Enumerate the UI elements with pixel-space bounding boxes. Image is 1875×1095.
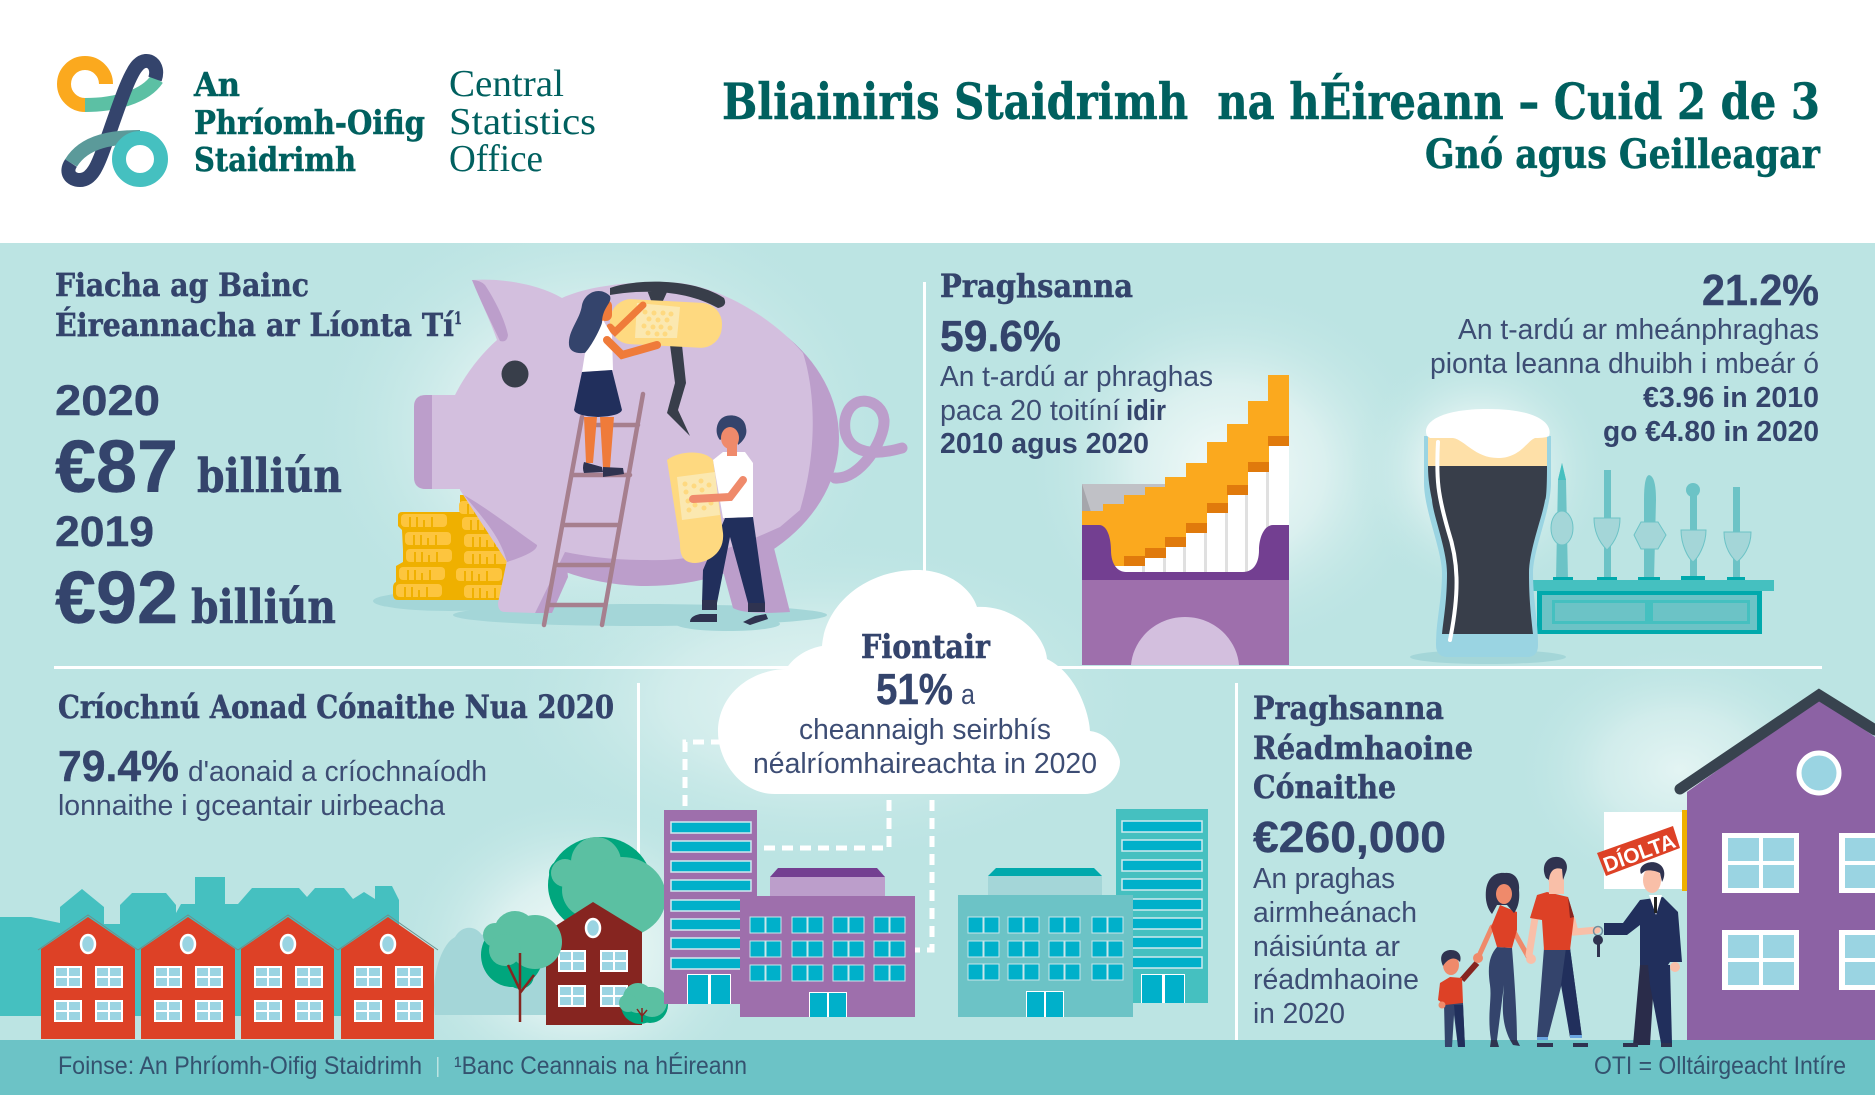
- heading: prices: Praghsanna: [940, 267, 1133, 305]
- illustration: trees and brown house: [481, 837, 668, 1025]
- illustration: town skyline: [0, 877, 549, 1016]
- heading: property prices: [1253, 689, 1473, 806]
- stat: pint price rise: 21.2%: [1702, 266, 1819, 315]
- heading: dwelling completions: Críochnú Aonad Cónaithe Nua 2020: [58, 688, 614, 726]
- stat: cigarette price rise: idir: [1126, 395, 1166, 427]
- panel: enterprises cloud computing: [664, 570, 1208, 1017]
- stat: pint price rise: go €4.80 in 2020: [1603, 416, 1819, 448]
- logo English name: [449, 63, 596, 180]
- stat: urban dwellings: lonnaithe i gceantair uirbeacha: [58, 790, 446, 822]
- stat: mean price: airmheánach: [1253, 897, 1417, 929]
- ladder: [544, 394, 643, 625]
- logo Irish name: Staidrimh: [194, 140, 356, 179]
- footer abbreviation: OTI = Olltáirgeacht Intíre: [1594, 1052, 1846, 1080]
- logo mark: [64, 61, 161, 180]
- stat: cigarette price rise: paca 20 toitíní: [940, 395, 1120, 427]
- logo English name: Statistics: [449, 101, 596, 143]
- illustration: cigarette pack: [1082, 375, 1289, 665]
- stat: mean price: in 2020: [1253, 998, 1345, 1030]
- sign: sold: [1597, 810, 1687, 891]
- stat: 2019 debt: [55, 508, 336, 639]
- illustration: coins: [373, 495, 527, 611]
- stat: mean price: [1253, 813, 1446, 1030]
- illustration: estate agent with keys: [1593, 862, 1682, 1047]
- stat: mean price: réadmhaoine: [1253, 964, 1419, 996]
- stat: 2020 debt: billiún: [197, 449, 342, 504]
- illustration: man with plaster: [667, 415, 768, 625]
- stat: 2019 debt: billiún: [191, 580, 336, 635]
- heading: household debt: [55, 266, 462, 344]
- logo Irish name: Phríomh-Oifig: [194, 103, 425, 142]
- cloud text: néalríomhaireachta in 2020: [753, 748, 1097, 780]
- panel: household debt: [55, 266, 902, 639]
- stat: 2019 debt: €92: [55, 556, 178, 639]
- stat: mean price: €260,000: [1253, 813, 1446, 862]
- illustration: boy: [1438, 950, 1483, 1047]
- illustration: purple office buildings: [664, 810, 915, 1017]
- cloud text: 51%: [876, 665, 953, 714]
- stat: urban dwellings: [58, 742, 487, 822]
- panel: prices: [940, 266, 1819, 665]
- heading: property prices: Cónaithe: [1253, 768, 1396, 806]
- illustration: purple house: [1680, 695, 1875, 1040]
- footer source: Foinse: An Phríomh-Oifig Staidrimh: [58, 1052, 422, 1080]
- stat: 2020 debt: [55, 377, 342, 508]
- illustration: piggy bank: [414, 280, 902, 631]
- stat: 2020 debt: 2020: [55, 377, 160, 425]
- illustration: red terraced houses: [38, 915, 438, 1039]
- logo English name: Office: [449, 138, 543, 180]
- logo: Central Statistics Office: [64, 61, 596, 180]
- illustration: teal office buildings: [958, 809, 1208, 1017]
- stat: pint price rise: pionta leanna dhuibh i mbeár ó: [1430, 348, 1819, 380]
- heading: household debt: Fiacha ag Bainc: [55, 266, 309, 304]
- heading: household debt: 1: [454, 309, 462, 329]
- illustration: woman: [1478, 873, 1530, 1047]
- panel: residential property prices: [1253, 689, 1875, 1047]
- logo Irish name: An: [193, 65, 240, 104]
- subtitle: Gnó agus Geilleagar: [1425, 131, 1821, 178]
- cloud shape: [718, 570, 1120, 794]
- footer note: ¹Banc Ceannais na hÉireann: [454, 1051, 747, 1080]
- cloud text: [753, 627, 1097, 780]
- stat: 2019 debt: 2019: [55, 508, 154, 556]
- heading: property prices: Praghsanna: [1253, 689, 1444, 727]
- stat: cigarette price rise: 2010 agus 2020: [940, 428, 1149, 460]
- illustration: beer taps and bar: [1533, 463, 1774, 634]
- cloud text: a: [961, 679, 976, 711]
- stat: urban dwellings: d'aonaid a críochnaíodh: [188, 756, 487, 788]
- stat: cigarette price rise: [940, 312, 1213, 460]
- heading: household debt: Éireannacha ar Líonta Tí: [55, 306, 454, 344]
- stat: pint price rise: €3.96 in 2010: [1643, 382, 1819, 414]
- illustration: pint of stout: [1410, 409, 1566, 664]
- stat: pint price rise: An t-ardú ar mheánphraghas: [1458, 314, 1819, 346]
- stat: cigarette price rise: 59.6%: [940, 312, 1061, 361]
- cloud text: cheannaigh seirbhís: [799, 714, 1051, 746]
- teal content panel: [0, 243, 1875, 1040]
- stat: urban dwellings: 79.4%: [58, 742, 179, 791]
- stat: mean price: náisiúnta ar: [1253, 931, 1400, 963]
- stat: 2020 debt: €87: [55, 425, 178, 508]
- illustration: man: [1526, 857, 1597, 1047]
- stat: mean price: An praghas: [1253, 863, 1395, 895]
- footer band: [0, 1040, 1875, 1095]
- crack: [610, 282, 725, 436]
- stat: cigarette price rise: An t-ardú ar phraghas: [940, 361, 1213, 393]
- sign: sold: DÍOLTA: [1600, 830, 1679, 877]
- stat: pint price rise: [1430, 266, 1819, 448]
- cloud text: Fiontair: [861, 627, 991, 666]
- illustration: woman on ladder with plaster: [544, 291, 723, 625]
- logo English name: Central: [449, 63, 564, 105]
- panel: new dwelling completions: [0, 688, 668, 1039]
- logo Irish name: [193, 65, 425, 179]
- dashed connectors: [685, 742, 932, 950]
- heading: property prices: Réadmhaoine: [1253, 729, 1473, 767]
- header background: [0, 0, 1875, 243]
